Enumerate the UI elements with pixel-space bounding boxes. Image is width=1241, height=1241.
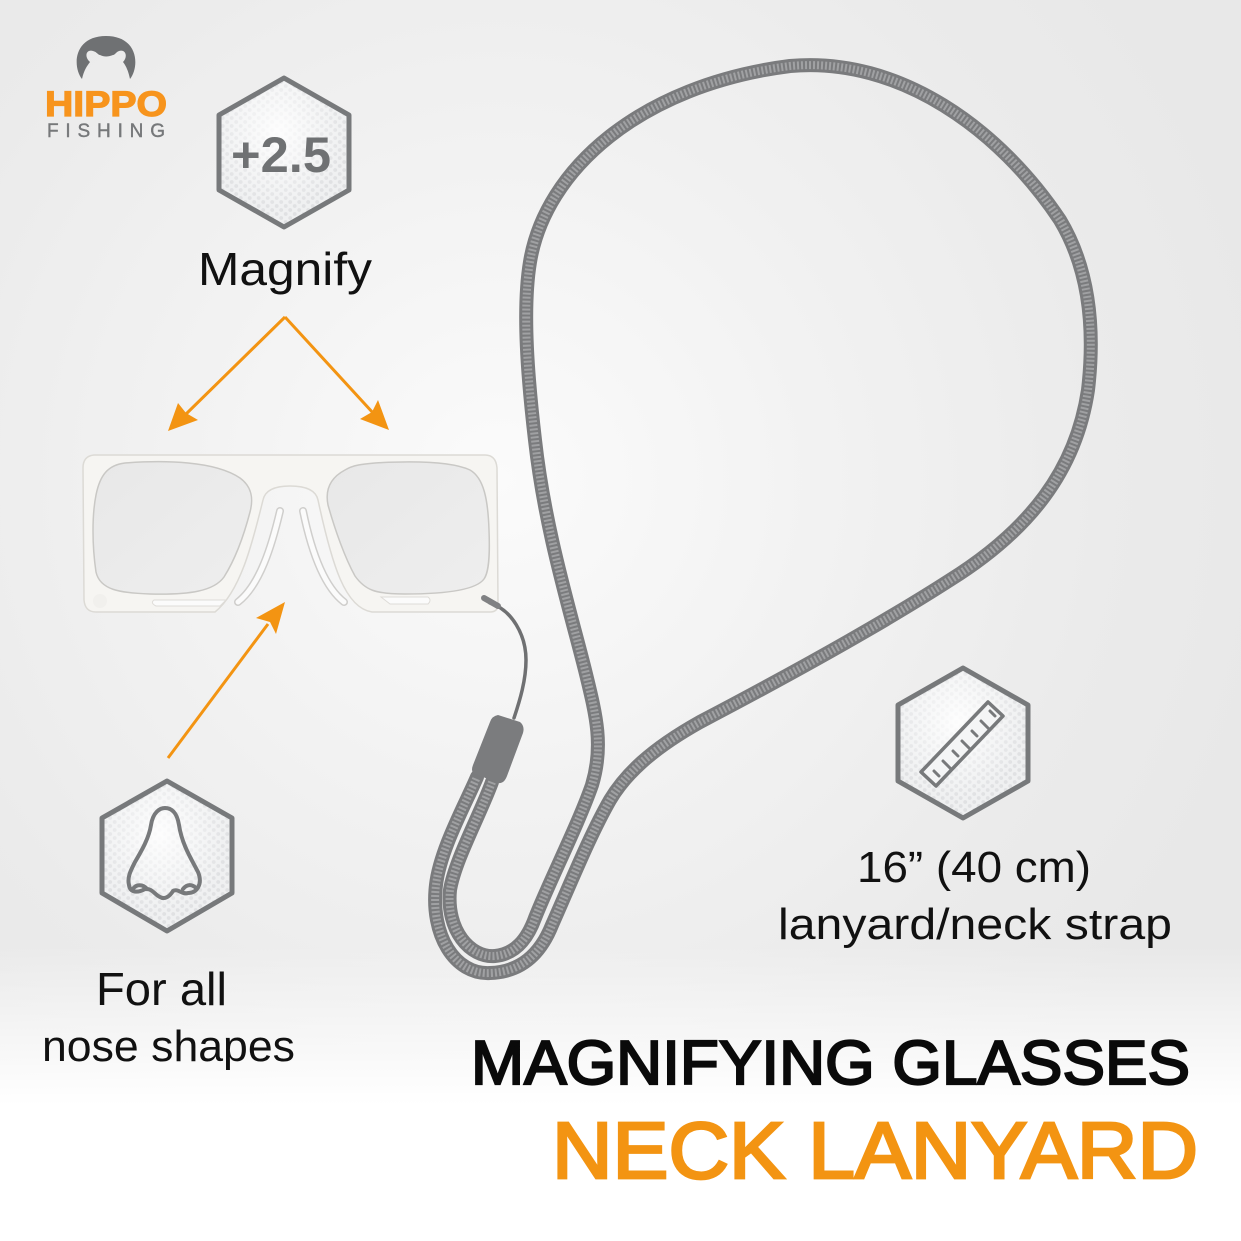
arrow: to nose area (168, 602, 285, 758)
label: For all nose shapes: nose shapes (42, 1022, 295, 1071)
arrows: magnify to lenses (168, 317, 389, 431)
icon: ruler hexagon (898, 668, 1028, 818)
label: Magnify: Magnify (198, 243, 372, 295)
nose outline (128, 808, 200, 898)
ruler (921, 702, 1003, 786)
cord knot (484, 598, 498, 606)
icon: hippo head (77, 36, 135, 79)
main strap loop (435, 65, 1091, 973)
slider (472, 715, 524, 783)
icon: nose hexagon (102, 781, 232, 931)
title line 1: MAGNIFYING GLASSES (471, 1029, 1190, 1098)
label: lanyard length: 16” (40 cm) (857, 843, 1091, 892)
icon: +2.5 magnification hexagon: +2.5 (231, 127, 331, 183)
label: For all nose shapes (42, 963, 295, 1071)
card lower slots (152, 600, 226, 606)
logo wordmark: HIPPO (45, 85, 167, 124)
right lens (327, 462, 489, 594)
icon: +2.5 magnification hexagon (219, 78, 349, 227)
label: lanyard length: lanyard/neck strap (778, 900, 1172, 949)
title line 2: NECK LANYARD (552, 1106, 1198, 1195)
left lens (93, 462, 252, 594)
reading glasses card (83, 455, 498, 612)
nose pads (238, 511, 344, 602)
logo subtitle: FISHING (47, 121, 165, 142)
label: lanyard length (778, 843, 1172, 949)
logo: Hippo Fishing (45, 36, 167, 142)
title (471, 1029, 1198, 1195)
label: For all nose shapes: For all (96, 963, 227, 1015)
card body (83, 455, 498, 612)
thin cord to glasses (490, 603, 526, 718)
neck lanyard (435, 65, 1091, 973)
